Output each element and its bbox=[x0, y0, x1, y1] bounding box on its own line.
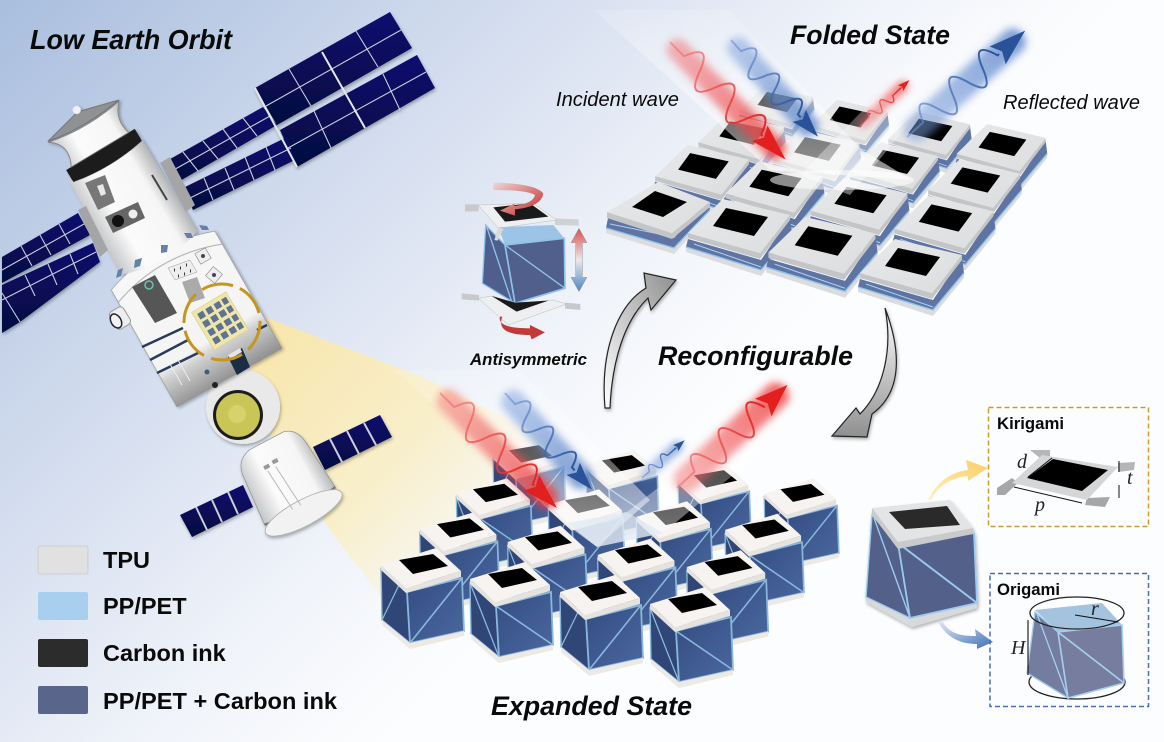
folded state: blue reflected wave bbox=[897, 19, 1035, 148]
curved arrow: expanded to folded bbox=[604, 273, 676, 408]
dimension arrows bbox=[1014, 458, 1119, 503]
antisymmetric unit cell bbox=[462, 183, 587, 339]
legend label: PP/PET + Carbon ink: PP/PET + Carbon ink bbox=[103, 688, 338, 714]
title: Folded State: Folded State bbox=[790, 20, 950, 50]
legend: materials bbox=[38, 546, 338, 714]
expanded state: red incident wave bbox=[429, 382, 567, 519]
label: Reflected wave: Reflected wave bbox=[1003, 92, 1140, 114]
vertical double arrow bbox=[571, 228, 587, 292]
label: Antisymmetric: Antisymmetric bbox=[469, 351, 587, 369]
top kirigami plate bbox=[465, 203, 579, 228]
label: Incident wave: Incident wave bbox=[556, 89, 679, 111]
expanded state: red reflected wave bbox=[667, 375, 797, 498]
expanded state metasurface array bbox=[381, 440, 839, 688]
legend swatch: Carbon ink bbox=[38, 639, 88, 667]
panel: Kirigami bbox=[988, 408, 1148, 526]
metasurface patch on the satellite with dashed circle bbox=[171, 271, 273, 373]
origami cell in circumscribed cylinder bbox=[1027, 597, 1125, 699]
dimension r: r bbox=[1091, 598, 1099, 620]
curved arrow: folded to expanded bbox=[832, 308, 896, 437]
yellow beam from satellite patch to metasurface bbox=[245, 316, 610, 602]
heading: Origami: Origami bbox=[997, 581, 1060, 599]
title: Expanded State: Expanded State bbox=[491, 691, 692, 721]
legend label: PP/PET: PP/PET bbox=[103, 593, 187, 619]
label: Reconfigurable: Reconfigurable bbox=[658, 341, 853, 371]
dimension p: p bbox=[1033, 494, 1045, 516]
single unit cell bbox=[866, 500, 977, 627]
dimension t: t bbox=[1127, 467, 1133, 489]
satellite: rear solar arrays bbox=[2, 12, 435, 333]
satellite: body details bbox=[78, 157, 267, 388]
folded state metasurface array bbox=[606, 85, 1047, 316]
legend swatch: TPU bbox=[38, 546, 88, 574]
folded state: blue incident wave bbox=[722, 32, 827, 145]
legend label: Carbon ink: Carbon ink bbox=[103, 640, 227, 666]
bottom kirigami plate bbox=[462, 293, 580, 325]
expanded state: blue incident wave bbox=[496, 385, 601, 498]
legend swatch: PP/PET + Carbon ink bbox=[38, 686, 88, 714]
satellite: main body bbox=[17, 78, 284, 410]
kirigami plate bbox=[997, 450, 1135, 507]
bottom rotation arrow bbox=[500, 317, 545, 339]
second spacecraft module with solar wings bbox=[180, 370, 392, 545]
dimension H: H bbox=[1010, 637, 1027, 659]
origami cube bbox=[482, 225, 565, 303]
legend label: TPU: TPU bbox=[103, 547, 150, 573]
expanded state: translucent wave beams bbox=[395, 370, 830, 547]
curved arrow to kirigami panel bbox=[928, 460, 988, 500]
folded state: red incident wave bbox=[659, 31, 796, 170]
folded state: translucent wave beams bbox=[594, 8, 1005, 195]
expanded state: weak blue reflected wave bbox=[639, 436, 688, 482]
curved arrow to origami panel bbox=[938, 621, 993, 649]
panel: Origami bbox=[990, 574, 1148, 706]
folded state: weak red reflected wave bbox=[856, 76, 913, 131]
heading: Kirigami: Kirigami bbox=[997, 415, 1064, 433]
legend swatch: PP/PET bbox=[38, 592, 88, 620]
top rotation arrow bbox=[493, 183, 543, 216]
dimension d: d bbox=[1017, 451, 1028, 473]
title: Low Earth Orbit: Low Earth Orbit bbox=[30, 24, 234, 55]
